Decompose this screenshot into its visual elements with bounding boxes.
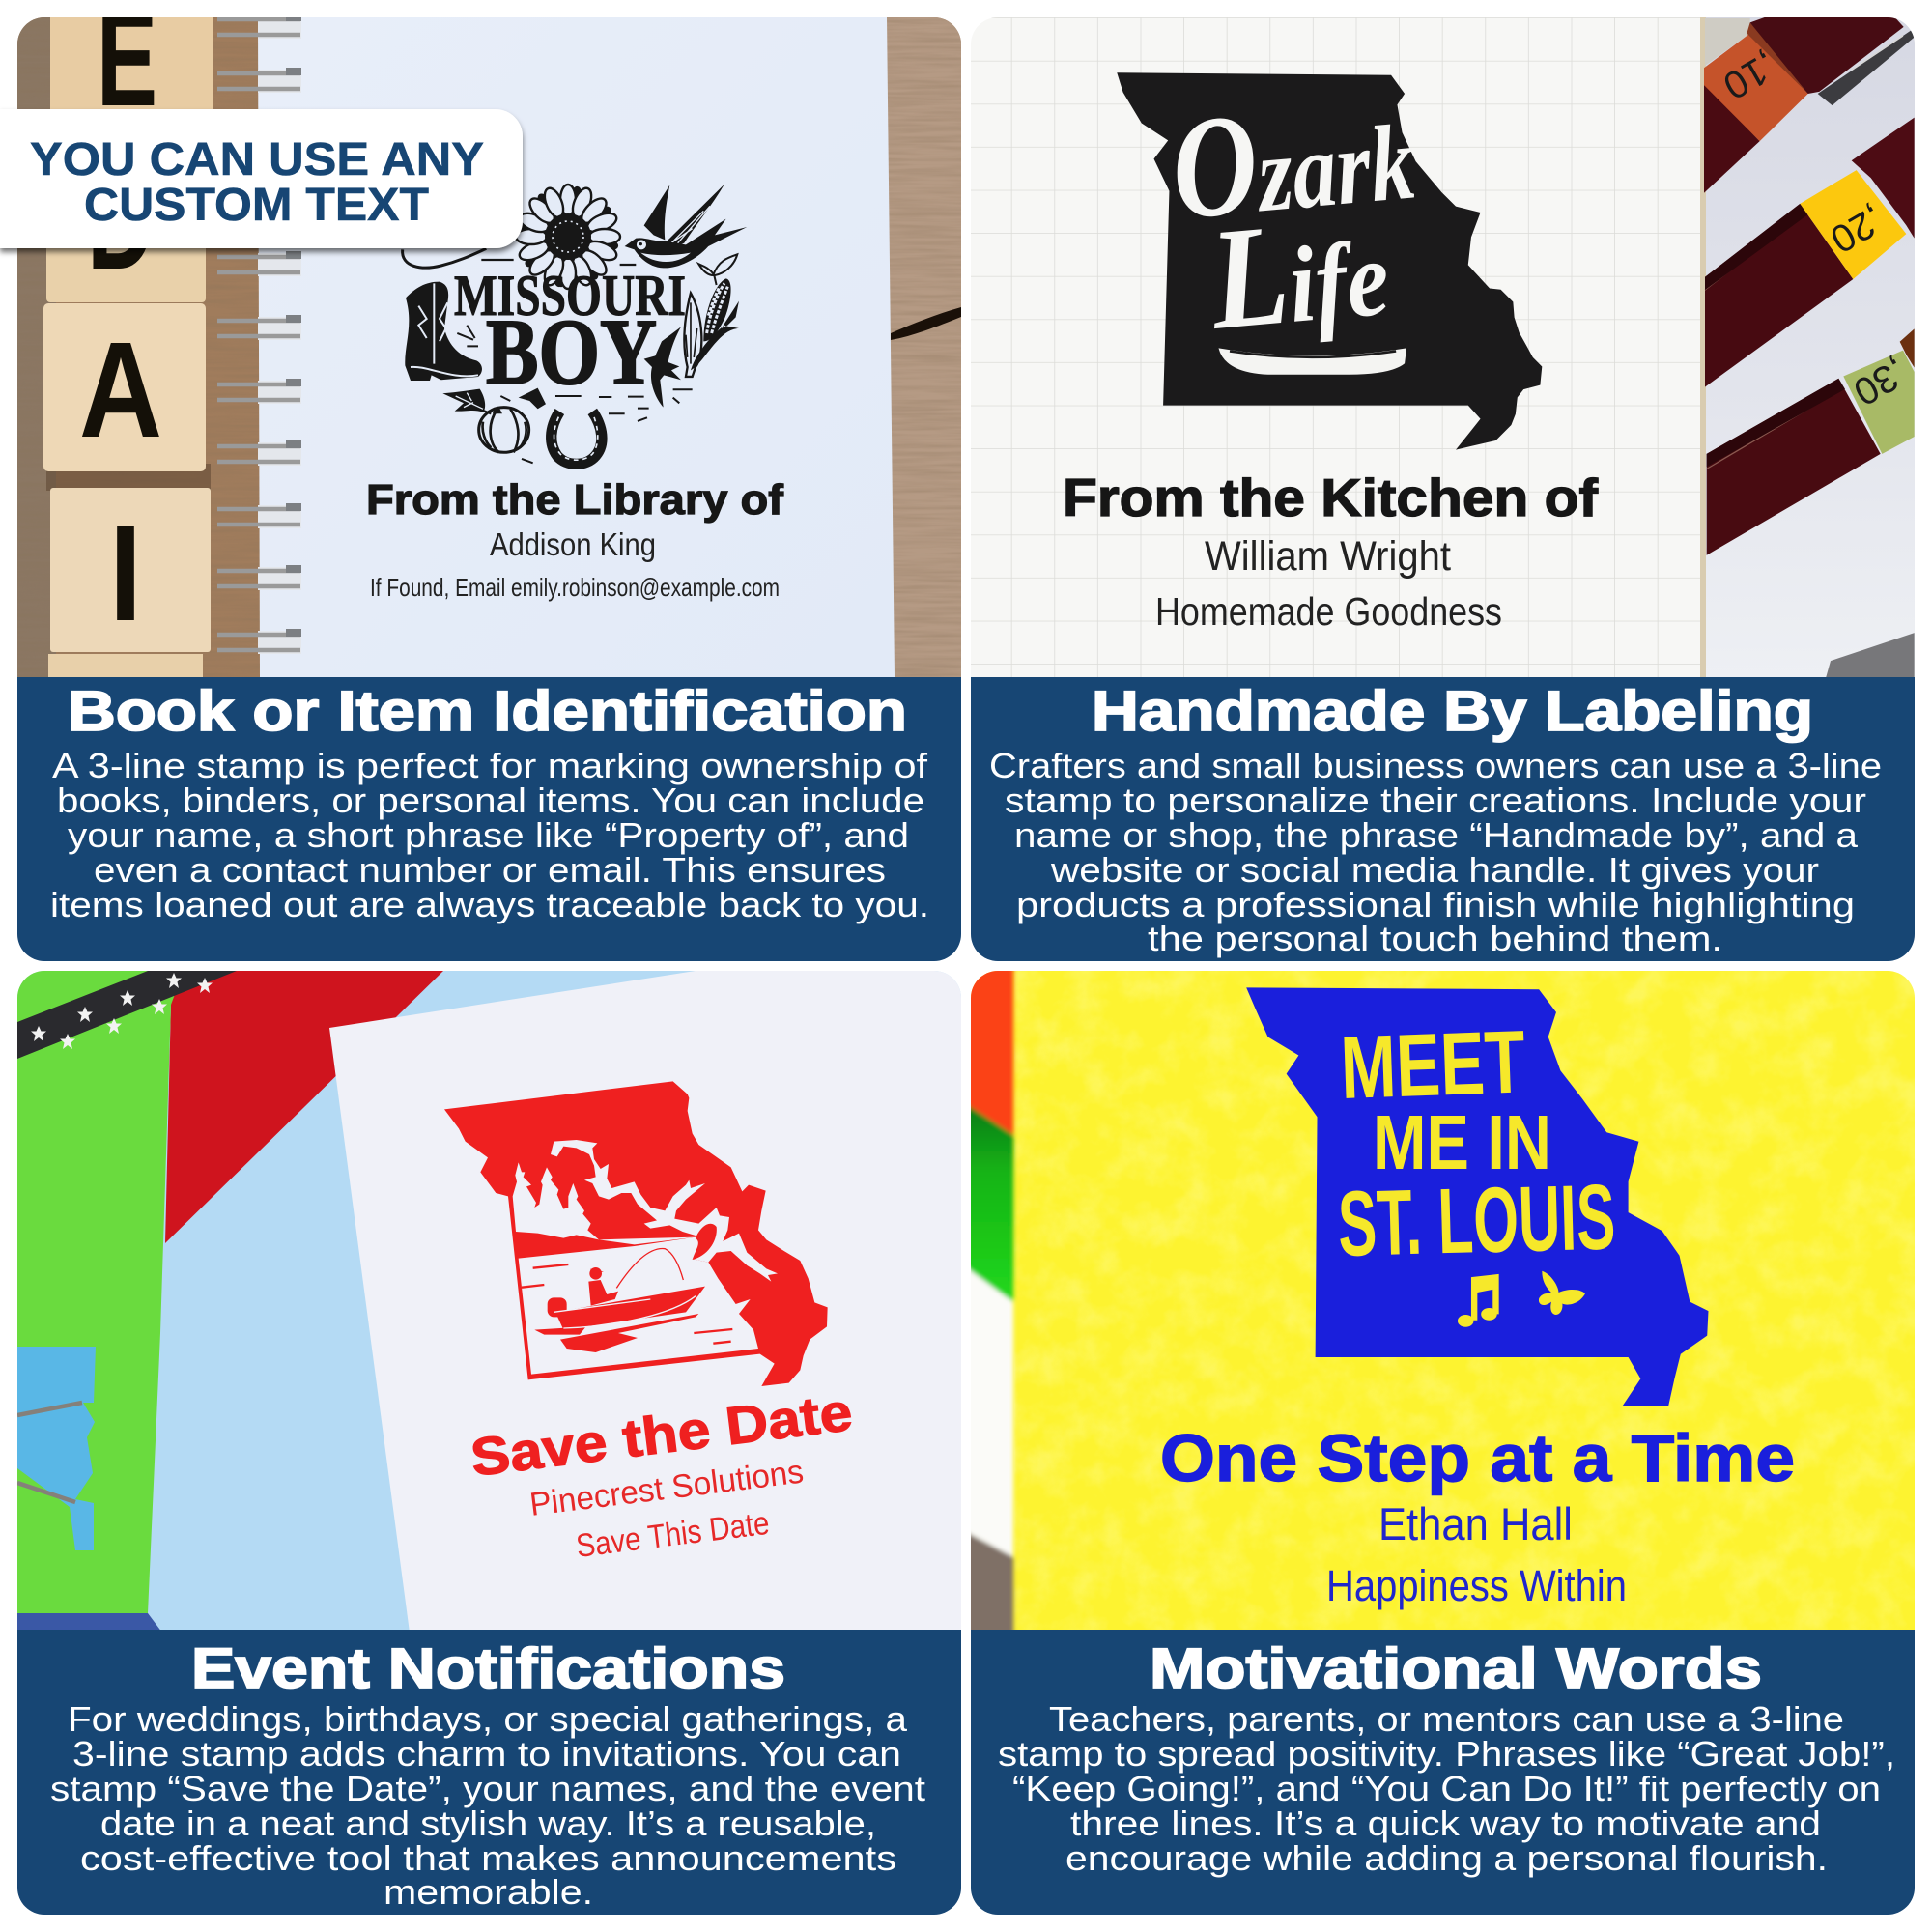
wooden block I: I (109, 497, 142, 649)
heading: Book or Item Identification (68, 680, 907, 743)
body text: “Keep Going!”, and “You Can Do It!” fit perfectly on (1012, 1769, 1881, 1808)
body text: Teachers, parents, or mentors can use a 3-line (1049, 1699, 1844, 1739)
body text (989, 746, 1882, 958)
notebook paper (258, 17, 895, 677)
body text: products a professional finish while highlighting (1016, 885, 1855, 924)
stamp script: Ozark: Ozark (1165, 70, 1420, 250)
caption box (971, 677, 1915, 961)
stamp line: email: If Found, Email emily.robinson@example.com (370, 573, 780, 602)
body text: A 3-line stamp is perfect for marking ownership of (52, 746, 928, 785)
caption box (17, 1630, 961, 1915)
photo: yellow cardstock (966, 966, 1922, 1642)
panel: book or item identification (17, 0, 971, 961)
stamp line: One Step at a Time: One Step at a Time (1160, 1421, 1795, 1495)
stamp script: Life: Life (1203, 185, 1394, 360)
wooden block I (50, 488, 211, 652)
body text: books, binders, or personal items. You can include (57, 781, 924, 820)
badge: you can use any custom text: CUSTOM TEXT (84, 180, 429, 231)
stamp artwork: Missouri Boy heart of icons (403, 185, 747, 464)
stamp line: William Wright: William Wright (1205, 533, 1451, 580)
heading: Motivational Words (1150, 1637, 1762, 1700)
icon: swallow large (625, 185, 747, 268)
stamp: blue Missouri silhouette (1246, 987, 1709, 1406)
stamp: Missouri lake fishing scene (444, 1081, 828, 1386)
caption box (971, 1630, 1915, 1915)
body text: 3-line stamp adds charm to invitations. You can (72, 1734, 901, 1774)
icon: sunflower (516, 185, 620, 289)
body text: stamp to spread positivity. Phrases like “Great Job!”, (998, 1734, 1895, 1774)
pencil with stars (17, 971, 237, 1059)
wooden block D: D (87, 145, 155, 298)
body text: For weddings, birthdays, or special gatherings, a (68, 1699, 908, 1739)
pen size label 20: ,20 (1823, 197, 1891, 261)
body text: stamp “Save the Date”, your names, and the event (50, 1769, 925, 1808)
body text: your name, a short phrase like “Property of”, and (68, 815, 909, 855)
body text: even a contact number or email. This ensures (94, 850, 886, 890)
body text: name or shop, the phrase “Handmade by”, and a (1014, 815, 1859, 855)
spiral binding rings (217, 14, 301, 654)
panel: handmade by labeling (971, 17, 1919, 961)
icon: hat and lasso (403, 248, 636, 268)
stamp title: MEET: MEET (1339, 1012, 1527, 1118)
body text: website or social media handle. It gives your (1050, 850, 1819, 890)
icon: horseshoe (457, 326, 693, 464)
paper card (329, 971, 966, 1633)
icon: fishing boat (522, 1264, 732, 1352)
rapidograph pens (1704, 17, 1916, 678)
body text: stamp to personalize their creations. Include your (1005, 781, 1866, 820)
wooden block A: A (79, 313, 162, 466)
wooden block D (46, 248, 206, 302)
icon: butterfly (1539, 1271, 1585, 1315)
stamp title: ME IN: ME IN (1373, 1099, 1551, 1185)
stamp line: Pinecrest Solutions: Pinecrest Solutions (527, 1453, 806, 1523)
body text: encourage while adding a personal flourish. (1065, 1838, 1828, 1878)
badge: you can use any custom text: YOU CAN USE ANY (30, 134, 484, 185)
text: MISSOURI: MISSOURI (454, 264, 686, 327)
body text: items loaned out are always traceable back to you. (50, 885, 929, 924)
icon: small swallow (644, 327, 681, 408)
photo: grid paper and pens (971, 17, 1919, 684)
text: BOY: BOY (486, 300, 657, 405)
stamp line: Homemade Goodness: Homemade Goodness (1155, 589, 1502, 634)
body text: Crafters and small business owners can use a 3-line (989, 746, 1882, 785)
wooden block E (50, 17, 213, 109)
stamp line: Happiness Within: Happiness Within (1326, 1561, 1627, 1610)
binder clip (17, 1347, 96, 1550)
stamp line: Ethan Hall: Ethan Hall (1378, 1498, 1573, 1549)
stamp line: Save This Date: Save This Date (574, 1505, 771, 1565)
stamp line: From the Kitchen of: From the Kitchen of (1063, 468, 1599, 527)
pen size label 10: ,10 (1716, 43, 1784, 107)
badge: you can use any custom text (0, 109, 523, 248)
stamp title: ST. LOUIS: ST. LOUIS (1337, 1166, 1616, 1276)
panel: event notifications (17, 971, 966, 1915)
panel: motivational words (966, 966, 1922, 1915)
heading: Handmade By Labeling (1092, 680, 1813, 743)
heading: Event Notifications (191, 1637, 785, 1700)
body text: memorable. (384, 1872, 593, 1912)
photo: stationery desk (17, 971, 966, 1637)
stamp line: From the Library of: From the Library of (366, 476, 783, 524)
icon: corn cob (684, 254, 739, 377)
icon: music note (1458, 1274, 1499, 1327)
body text: the personal touch behind them. (1148, 919, 1722, 958)
body text: cost-effective tool that makes announcements (80, 1838, 896, 1878)
stamp: Missouri silhouette (1117, 72, 1542, 450)
body text (998, 1699, 1895, 1878)
wooden block A (43, 303, 206, 471)
photo: notebook with wooden blocks (17, 0, 971, 684)
caption box (17, 677, 961, 961)
stamp line: Save the Date: Save the Date (468, 1381, 856, 1488)
body text: date in a neat and stylish way. It’s a reusable, (100, 1804, 876, 1843)
icon: cowboy boot (405, 282, 482, 381)
body text (50, 1699, 925, 1912)
stamp line: Addison King: Addison King (490, 526, 656, 562)
pen size label 30: ,30 (1846, 350, 1915, 413)
body text (50, 746, 929, 924)
icon: leaves and pumpkin (442, 388, 546, 452)
body text: three lines. It’s a quick way to motivate and (1070, 1804, 1821, 1843)
